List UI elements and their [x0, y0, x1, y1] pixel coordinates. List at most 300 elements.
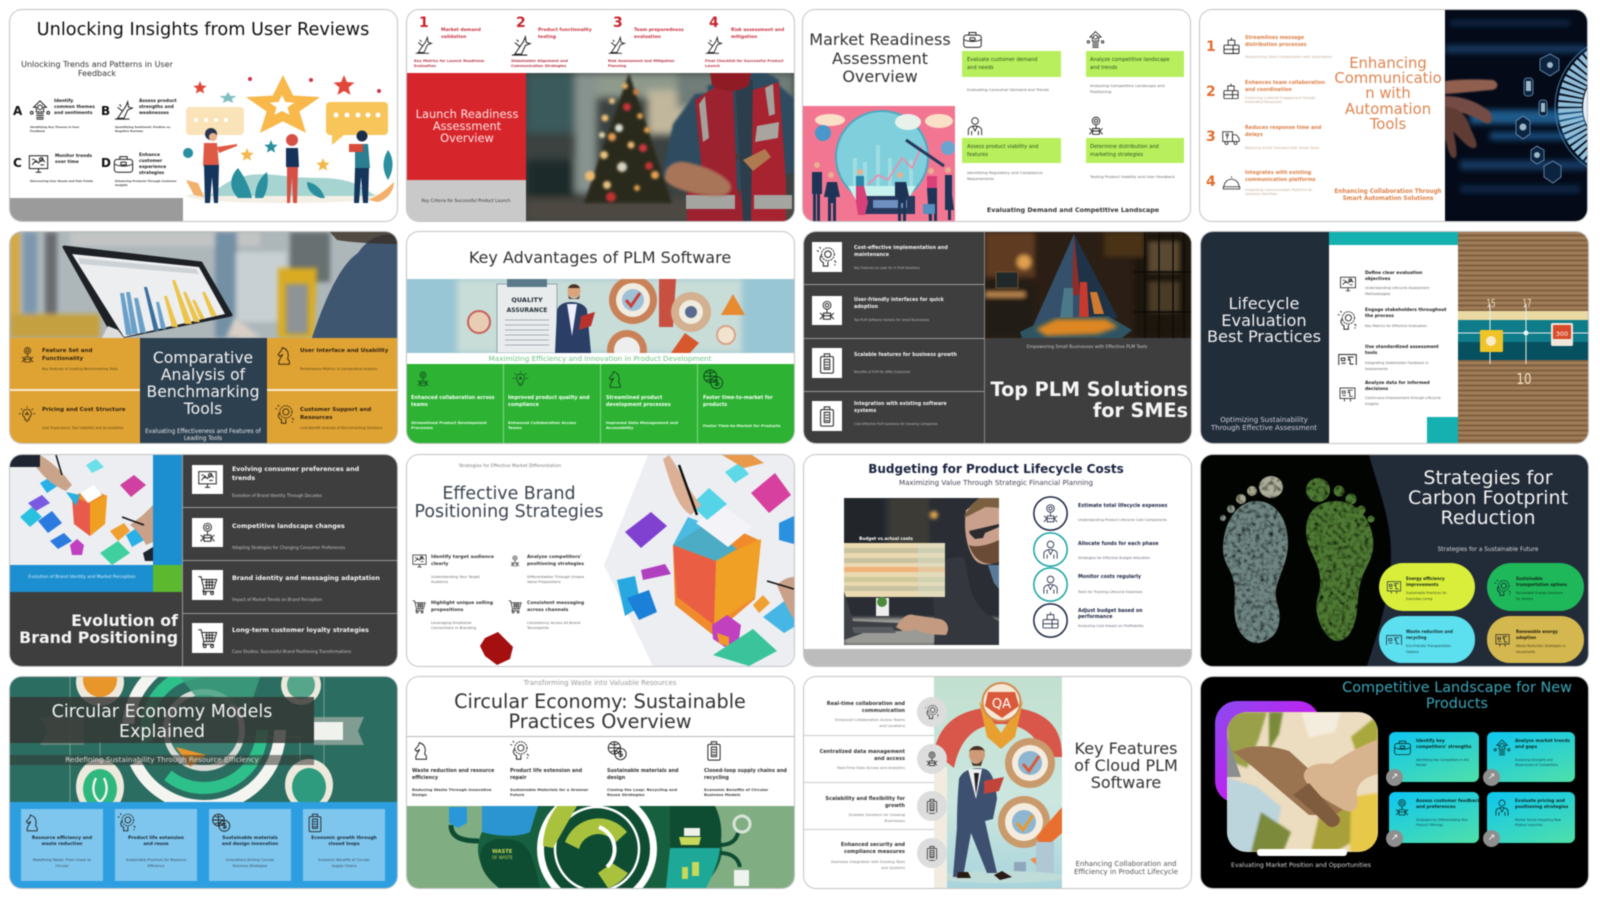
heading 2: compliance [508, 402, 539, 408]
heading 4: decisions [1365, 387, 1388, 392]
tagline band [407, 353, 794, 364]
title: Circular Economy Models [52, 702, 272, 722]
heading 1: competitors' strengths [1416, 745, 1471, 750]
heading 4 [527, 601, 584, 615]
heading 4 [1245, 170, 1316, 183]
description 2 [1515, 758, 1558, 768]
arrow badge 1: ↗ [1391, 772, 1398, 782]
title: Tools [1370, 116, 1406, 133]
illustration: quality assurance [407, 279, 794, 353]
item D description [114, 179, 177, 187]
description 4: Consistency Across All Brand [527, 621, 580, 625]
icon disc 3 [917, 791, 947, 821]
description 1: Everyday Living [1406, 597, 1432, 601]
box text 4 [1090, 143, 1159, 158]
description 3 [431, 621, 476, 632]
item D heading: strategies [139, 171, 164, 176]
footer caption: Enhancing Collaboration Through [1334, 189, 1442, 195]
description 2: for Homes [1516, 597, 1533, 601]
heading 4: Adjust budget based on [1078, 609, 1143, 614]
heading 3 [222, 836, 278, 848]
title: Overview [440, 131, 494, 145]
illustration: quality assurance: QUALITY [511, 296, 543, 304]
heading 4 [703, 395, 773, 409]
description 4: Testing Product Viability and User Feedback [1090, 174, 1175, 179]
heading 1: Resource efficiency and [32, 836, 92, 841]
pill 1 [1379, 563, 1475, 611]
heading 3: Assess customer feedback [1416, 799, 1480, 804]
letter B: B [101, 104, 110, 118]
description 4 [527, 621, 580, 632]
heading 3: Waste reduction and [1406, 629, 1453, 634]
ring icon 4 [1033, 603, 1068, 638]
item B description [114, 125, 172, 133]
description 1: and Locations [879, 724, 905, 728]
icon 2 [117, 812, 137, 833]
title band [10, 697, 314, 743]
panel: Enhancing Communication with Automation Tools [1200, 10, 1587, 221]
title: Assessment [433, 119, 501, 133]
description 2 [508, 420, 576, 430]
description 4 [1245, 188, 1313, 197]
description 4 [704, 787, 768, 797]
description 1: Key Metrics for Launch Readiness [414, 59, 484, 63]
description 3: Connections in Branding [431, 626, 476, 630]
red hexagon [480, 632, 513, 665]
photo: timeline on wood: 300 [1556, 330, 1568, 338]
title: Lifecycle [1228, 294, 1300, 313]
item A heading: Identify [54, 99, 73, 104]
footer bar [10, 198, 183, 221]
title: Assessment [832, 49, 928, 68]
heading 2 [538, 26, 592, 40]
icon 4 [1493, 798, 1511, 817]
description 1: Streamlined Product Development [411, 420, 487, 425]
tagline: Maximizing Efficiency and Innovation in Product Development [489, 354, 711, 363]
heading 3 [431, 601, 493, 615]
icon: pin gear [1088, 116, 1104, 136]
description 4: Integrating Communication Platforms for [1245, 188, 1313, 192]
heading 1: Estimate total lifecycle expenses [1078, 504, 1167, 509]
icon 4 [705, 36, 724, 55]
amber panel left [10, 338, 140, 443]
subtitle: Maximizing Value Through Strategic Financial Planning [899, 478, 1093, 487]
description 3: Reducing Email Overload with Smart Tools [1245, 146, 1319, 150]
heading 2: and access [874, 756, 905, 762]
heading: feature set: Functionality [42, 356, 83, 362]
description 3 [1406, 644, 1451, 656]
illustration: design cards [10, 455, 153, 565]
number 4: 4 [1206, 174, 1216, 190]
heading 4: Risk assessment and [731, 28, 784, 33]
box text 2: and trends [1090, 65, 1117, 71]
caption: Evolution of Brand Identity and Market Perception [28, 575, 136, 580]
footer bar [804, 649, 1191, 666]
number 2: 2 [1206, 84, 1216, 100]
description 3 [849, 812, 905, 824]
item A description: Feedback [30, 129, 45, 133]
illustration: waste of waste circle: WASTE [492, 849, 513, 855]
title: Carbon Footprint [1408, 487, 1568, 509]
title: Market Readiness [809, 30, 951, 49]
description 2: Real-Time Data Access and Analytics [837, 766, 905, 770]
title: Launch Readiness [416, 107, 518, 121]
title [454, 692, 746, 732]
heading 2 [854, 298, 944, 311]
photo: footprints of earth and leaves [1201, 455, 1393, 666]
heading 2: Product life extension and [510, 768, 582, 774]
item A heading [54, 98, 96, 116]
description 1: Market [1416, 763, 1427, 767]
heading 1 [431, 555, 494, 569]
heading 3: Reduces response time and [1245, 125, 1321, 131]
card 4 [1487, 792, 1575, 843]
description 3 [226, 858, 274, 869]
heading 1: efficiency [412, 775, 438, 781]
icon 1 [411, 740, 433, 761]
description 3 [607, 787, 677, 797]
title: for SMEs [1093, 399, 1188, 422]
heading 1: Define clear evaluation [1365, 271, 1422, 276]
subtitle: Empowering Small Businesses with Effective PLM Tools [1027, 345, 1147, 350]
separator [407, 736, 794, 737]
description 4: Market Trends Impacting New [1515, 818, 1561, 822]
description: user interface: Performance Metrics: A Comparative Analysis [300, 367, 377, 371]
box text 1: and needs [967, 65, 994, 71]
item C heading: over time [55, 160, 79, 165]
green box 3 [962, 138, 1061, 163]
card 1 [21, 809, 103, 881]
title: Strategies for [1423, 467, 1553, 489]
small header: Strategies for Effective Market Differentiation [459, 464, 561, 469]
heading 1: teams [411, 402, 428, 408]
title: Evaluation [1221, 311, 1307, 330]
description 4 [1365, 396, 1441, 408]
heading 1: objectives [1365, 277, 1390, 282]
heading: customer support: Resources [300, 415, 332, 421]
description 4: Supply Chains [332, 864, 356, 868]
heading 2: and coordination [1245, 87, 1292, 93]
white pill [1257, 849, 1347, 856]
icon 3 [1337, 351, 1358, 365]
description 4: Continuous Improvement through Lifecycle [1365, 396, 1441, 400]
description: customer support: Cost-Benefit Analysis of Benchmarking Solutions [300, 426, 382, 430]
footer caption [1334, 189, 1442, 202]
card 2 [115, 809, 197, 881]
item B heading: weaknesses [139, 111, 169, 116]
divider left [10, 389, 140, 391]
description 4: Case Studies: Successful Brand Positioning Transformations [232, 649, 351, 654]
title: Key Advantages of PLM Software [469, 248, 731, 267]
subtitle [21, 60, 174, 78]
heading 4: Closed-loop supply chains and [704, 768, 787, 774]
heading 2 [1516, 576, 1567, 588]
heading 1: validation [441, 35, 466, 40]
heading 3: recycling [1406, 635, 1426, 640]
description 3 [1365, 361, 1429, 373]
description 3: Scalable Solutions for Growing [849, 813, 905, 817]
number 4: 4 [709, 15, 719, 31]
title [1074, 740, 1178, 791]
title [809, 30, 951, 86]
heading 3 [1245, 125, 1321, 138]
heading 1: Cost-effective implementation and [854, 246, 948, 251]
description 3: Requirements [967, 176, 994, 181]
description 4: Households [1516, 650, 1535, 654]
item D heading: customer [139, 159, 162, 164]
description 1: Evolution of Brand Identity Through Decades [232, 493, 322, 498]
subtitle: Leading Tools [184, 436, 222, 442]
heading 3: evaluation [634, 35, 661, 40]
description 4: Faster Time-to-Market for Products [703, 423, 780, 428]
subtitle [1074, 860, 1178, 877]
heading 2: Allocate funds for each phase [1078, 542, 1159, 547]
heading 4: Integration with existing software [854, 402, 947, 407]
panel: Market Readiness Assessment Overview [803, 10, 1190, 221]
box text 4: Determine distribution and [1090, 144, 1159, 150]
icon 3 [211, 812, 231, 833]
heading 2: Engage stakeholders throughout [1365, 308, 1446, 313]
icon 4 [1494, 632, 1511, 648]
item C heading: Monitor trends [55, 154, 92, 159]
item C heading [54, 152, 92, 165]
title [19, 612, 178, 646]
heading 1: Energy efficiency [1406, 576, 1445, 581]
heading 3: Highlight unique selling [431, 601, 493, 606]
box text 3: features [967, 152, 988, 158]
teal top bar [1329, 232, 1458, 245]
description 1: Design [412, 792, 427, 797]
heading 4: performance [1078, 615, 1113, 620]
heading 4: mitigation [731, 35, 757, 40]
icon: briefcase [113, 155, 134, 174]
heading: feature set [42, 347, 93, 363]
heading 1: waste reduction [41, 842, 82, 847]
heading 4: Faster time-to-market for [703, 395, 773, 401]
column separator [182, 455, 183, 666]
description 2 [1090, 83, 1165, 94]
heading 3 [606, 395, 671, 409]
subtitle: Redefining Sustainability Through Resource Efficiency [65, 755, 259, 764]
icon 4 [703, 740, 725, 761]
panel: Comparative Analysis of Benchmarking Tools [10, 232, 397, 443]
column separator [984, 232, 985, 443]
description 2 [1516, 591, 1563, 603]
icon: gear [274, 404, 296, 425]
heading 3: and design innovation [222, 842, 278, 847]
heading 2: repair [510, 775, 526, 781]
icon disc 4 [917, 838, 947, 868]
card 3 [1389, 792, 1479, 843]
heading 2: Centralized data management [820, 749, 905, 755]
description 2: Future [510, 792, 524, 797]
item D heading [138, 152, 167, 176]
illustration: crystal ball data [802, 105, 956, 222]
panel: Launch Readiness Assessment Overview [407, 10, 794, 221]
icon disc 1 [917, 697, 947, 727]
icon 3 [411, 599, 427, 614]
icon 1 [1337, 275, 1359, 293]
icon: money house [29, 100, 51, 120]
title: Communicatio [1334, 70, 1442, 87]
arrow badge 2: ↗ [1488, 772, 1495, 782]
arrow badge 4 [1483, 830, 1500, 847]
title: Positioning Strategies [415, 502, 603, 522]
icon disc 2 [917, 744, 947, 774]
box text 2: Analyze competitive landscape [1090, 57, 1169, 63]
description: feature set: Key Features of Leading Benchmarking Tools [42, 367, 118, 371]
icon: bulb [18, 404, 36, 425]
heading 4 [1515, 799, 1568, 811]
green box 1 [962, 51, 1061, 77]
panel: Lifecycle Evaluation Best Practices [1201, 232, 1588, 443]
icon box 1 [812, 242, 842, 272]
icon: money house [1086, 30, 1105, 49]
heading 1: Evolving consumer preferences and [232, 466, 359, 473]
title: Comparative [153, 349, 253, 367]
blue caption band [10, 565, 153, 592]
description 1 [1406, 591, 1447, 603]
heading 2: Competitive landscape changes [232, 523, 345, 530]
title: Practices Overview [508, 710, 692, 733]
subtitle [145, 429, 261, 443]
description 4: Cost-Effective PLM Solutions for Growing Companies [854, 422, 938, 426]
illustration: quality assurance: ASSURANCE [507, 307, 547, 314]
description 4 [1515, 818, 1561, 828]
heading 2 [1245, 80, 1325, 93]
description 3: Businesses [885, 819, 905, 823]
description 2: Sustainable Practices for Resource [126, 858, 186, 862]
number 3: 3 [613, 15, 623, 31]
description 1: Understanding Lifecycle Assessment [1365, 286, 1429, 290]
description 4: Touchpoints [527, 626, 549, 630]
title: Unlocking Insights from User Reviews [37, 20, 369, 40]
photo: timeline on wood: 17 [1522, 297, 1532, 310]
photo: handshake over world map [1227, 712, 1378, 852]
heading 2: Analyze market trends [1515, 739, 1570, 744]
description 2 [1245, 96, 1315, 105]
description 1: Methodologies [1365, 292, 1391, 296]
heading 2 [1365, 308, 1446, 320]
heading 1: maintenance [854, 253, 889, 258]
letter A: A [13, 104, 22, 118]
icon 2 [1493, 738, 1511, 757]
title: Software [1091, 773, 1161, 792]
heading 4 [854, 402, 947, 415]
heading 3 [825, 796, 905, 810]
panel: Key Features of Cloud PLM Software [804, 677, 1191, 888]
heading 1 [854, 246, 948, 259]
description 3: Identifying Regulatory and Compliance [967, 170, 1043, 175]
footer caption: Smart Automation Solutions [1343, 196, 1433, 202]
arrow badge 3 [1386, 830, 1403, 847]
description 3: Leveraging Emotional [431, 621, 471, 625]
heading 2: testing [538, 35, 556, 40]
pill 4 [1487, 616, 1584, 663]
description 3: Integrating Stakeholder Feedback in [1365, 361, 1429, 365]
description 3: Strategies for Differentiating Your [1416, 818, 1468, 822]
photo: worker and Christmas tree [525, 72, 795, 222]
panel: Key Advantages of PLM Software [407, 232, 794, 443]
heading 3: design [607, 775, 625, 781]
heading 3: Streamlined product [606, 395, 662, 401]
navy title panel [1201, 232, 1329, 443]
caption: Evaluating Market Position and Opportunities [1231, 862, 1371, 869]
number 1: 1 [1206, 39, 1216, 55]
heading: pricing: Pricing and Cost Structure [42, 407, 126, 413]
icon 1 [23, 812, 43, 833]
description 1 [1416, 758, 1469, 768]
description 3: Assessments [1365, 367, 1388, 371]
icon 4 [1221, 174, 1242, 192]
icon box 3 [192, 570, 223, 600]
photo: man at laptop with budget table [844, 498, 999, 645]
heading 1 [1365, 271, 1422, 283]
icon 4 [1337, 385, 1358, 403]
title: Circular Economy: Sustainable [454, 690, 746, 713]
item B description: Quantifying Sentiment: Positive vs. [115, 125, 171, 129]
subtitle: Efficiency in Product Lifecycle [1074, 868, 1178, 876]
centre title panel [140, 338, 267, 443]
item C description: Discovering User Needs and Pain Points [30, 179, 93, 183]
heading 3: delays [1245, 132, 1263, 138]
title: Evolution of [71, 611, 178, 630]
item D description: Insights [115, 183, 128, 187]
heading 1 [232, 465, 359, 483]
panel: Top PLM Solutions for SMEs [804, 232, 1191, 443]
item A heading: and sentiments [54, 111, 92, 116]
row separators [804, 735, 934, 736]
card 3 [209, 809, 291, 881]
row separators [804, 284, 985, 285]
heading 3: Scalability and flexibility for [825, 796, 905, 802]
icon 1 [1385, 579, 1403, 595]
description 4: Final Checklist for Successful Product [705, 59, 784, 63]
heading 1: distribution processes [1245, 42, 1307, 48]
illustration: waste of waste circle [407, 806, 794, 888]
heading 2 [1515, 739, 1570, 751]
description 4 [318, 858, 370, 869]
description 2: Positioning [1090, 89, 1111, 94]
arrow badge 3: ↗ [1391, 833, 1398, 843]
heading 3 [1406, 629, 1453, 641]
arrow badge 2 [1483, 769, 1500, 786]
description 4: Seamless Workflow [1245, 192, 1277, 196]
item B heading: strengths and [139, 105, 174, 110]
description 3: Impact of Market Trends on Brand Perception [232, 597, 322, 602]
number 3: 3 [1206, 129, 1216, 145]
title: Reduction [1440, 507, 1535, 529]
item B heading: Assess product [139, 99, 177, 104]
title: Brand Positioning [19, 628, 178, 647]
description 2 [510, 787, 588, 797]
heading 3 [634, 26, 684, 40]
description 3: Planning [608, 64, 626, 68]
description 4: and Systems [881, 866, 905, 870]
description 3: Business Strategies [233, 864, 267, 868]
description: pricing: User Experience: Tool Usability and Accessibility [42, 426, 124, 430]
heading 2 [820, 749, 905, 763]
box text 4: marketing strategies [1090, 152, 1143, 158]
description 1: Processes [411, 425, 433, 430]
description 3 [1416, 818, 1468, 828]
description 3: Tools for Tracking Lifecycle Expenses [1078, 590, 1142, 594]
heading 3: and preferences [1416, 805, 1456, 810]
blue sidebar [153, 455, 182, 565]
description 1 [414, 58, 485, 68]
heading 1: Enhanced collaboration across [411, 395, 495, 401]
description 2 [126, 858, 186, 869]
